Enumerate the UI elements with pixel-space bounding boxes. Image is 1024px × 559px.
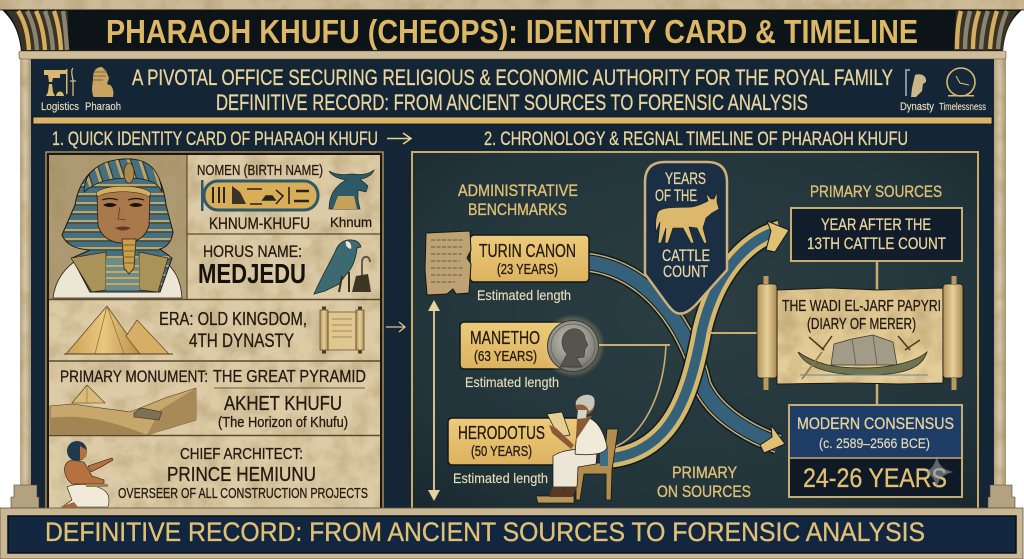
illustration: seated scribe Hemiunu: [60, 441, 113, 507]
scroll: Wadi el-Jarf papyri: (DIARY OF MERER): [807, 316, 916, 333]
title: PHARAOH KHUFU (CHEOPS): IDENTITY CARD & TIMELINE: [106, 13, 918, 50]
chief architect row: CHIEF ARCHITECT:: [180, 446, 303, 463]
icon: silver coin portrait: [541, 314, 605, 378]
panel: chronology and regnal timeline: [412, 152, 978, 510]
cartouche: [201, 180, 318, 211]
icon: dynasty figure: Dynasty: [900, 101, 934, 113]
source: Herodotus: Estimated length: [453, 470, 548, 486]
box: year after the 13th cattle count: 13TH CATTLE COUNT: [807, 234, 946, 253]
panel: years of the cattle count: [645, 162, 727, 314]
chief architect row: [60, 441, 368, 507]
primary monument row: AKHET KHUFU: [224, 393, 342, 415]
source: Turin Canon: TURIN CANON: [479, 241, 576, 261]
box: modern consensus: (c. 2589–2566 BCE): [819, 436, 930, 451]
icon: dynasty figure: [900, 69, 934, 113]
footer banner: DEFINITIVE RECORD: FROM ANCIENT SOURCES TO FORENSIC ANALYSIS: [45, 517, 925, 547]
nomen row: KHNUM-KHUFU: [209, 215, 310, 233]
panel: quick identity card: [46, 152, 383, 510]
source: Manetho: MANETHO: [470, 328, 540, 348]
source: Manetho: [460, 314, 605, 390]
footer banner: [0, 508, 1023, 559]
panel: years of the cattle count: OF THE: [655, 187, 697, 205]
era row: 4TH DYNASTY: [189, 331, 294, 352]
nomen row: Khnum: [330, 214, 372, 230]
label: primary on sources: [657, 463, 751, 501]
connectors: [876, 261, 878, 405]
icon: pharaoh bust: [85, 67, 121, 113]
primary monument row: THE GREAT PYRAMID: [213, 366, 366, 386]
era row: ERA: OLD KINGDOM,: [159, 308, 307, 329]
source: Turin Canon: Estimated length: [477, 287, 571, 303]
subtitle: [132, 65, 893, 115]
horus name row: [198, 240, 371, 294]
heading: primary sources: PRIMARY SOURCES: [810, 182, 942, 201]
section heading 2: 2. CHRONOLOGY & REGNAL TIMELINE OF PHARAOH KHUFU: [484, 129, 908, 150]
panel: years of the cattle count: CATTLE: [662, 247, 710, 265]
primary monument row: [50, 366, 366, 435]
sparkle mark: [925, 455, 954, 489]
source: Herodotus: [448, 395, 618, 503]
primary monument row: PRIMARY MONUMENT:: [60, 368, 208, 386]
chief architect row: PRINCE HEMIUNU: [167, 464, 316, 486]
heading: administrative benchmarks: BENCHMARKS: [468, 200, 567, 219]
box: modern consensus: MODERN CONSENSUS: [797, 415, 954, 433]
horus name row: MEDJEDU: [198, 258, 306, 289]
illustration: seated Herodotus: [536, 395, 618, 503]
era row: [64, 306, 364, 354]
icon: torn papyrus: [425, 231, 471, 295]
arrow head: to modern consensus: [760, 425, 785, 453]
flow streams: [585, 230, 780, 458]
label: primary on sources: PRIMARY: [672, 463, 737, 482]
heading: administrative benchmarks: ADMINISTRATIVE: [458, 181, 578, 200]
icon: pyramids: [64, 306, 173, 354]
source: Herodotus: HERODOTUS: [458, 423, 545, 443]
timeline double arrow: [428, 300, 440, 501]
box: modern consensus: 24-26 YEARS: [803, 463, 947, 493]
arrow head: to year after 13th cattle count: [766, 221, 789, 252]
nomen row: [197, 162, 374, 233]
illustration: boat with stone blocks: [798, 335, 928, 379]
icon: timelessness clock: [939, 68, 986, 113]
section heading 1: 1. QUICK IDENTITY CARD OF PHARAOH KHUFU: [52, 129, 378, 150]
box: modern consensus: [789, 405, 962, 497]
box: year after the 13th cattle count: YEAR AFTER THE: [821, 215, 931, 234]
connector arrow between panels: [386, 322, 405, 332]
source: Turin Canon: [425, 231, 589, 303]
primary monument row: (The Horizon of Khufu): [218, 415, 348, 431]
icon: Khnum ram god: [329, 170, 374, 209]
chief architect row: OVERSEER OF ALL CONSTRUCTION PROJECTS: [118, 486, 368, 502]
subtitle: DEFINITIVE RECORD: FROM ANCIENT SOURCES TO FORENSIC ANALYSIS: [216, 90, 808, 115]
icon: logistics hieroglyphs: Logistics: [41, 101, 79, 113]
source: Herodotus: (50 YEARS): [471, 444, 532, 460]
portrait of Khufu: [53, 159, 182, 298]
nomen row: NOMEN (BIRTH NAME): [197, 162, 323, 179]
scroll: Wadi el-Jarf papyri: THE WADI EL-JARF PAPYRI: [782, 298, 941, 315]
panel: years of the cattle count: COUNT: [663, 263, 708, 281]
horus name row: HORUS NAME:: [203, 242, 302, 261]
source: Manetho: Estimated length: [465, 374, 559, 390]
icon: Horus falcon: [314, 240, 371, 294]
heading: administrative benchmarks: [458, 181, 578, 219]
illustration: giza plateau: [50, 385, 196, 435]
icon: golden bull: [656, 192, 719, 243]
icon: timelessness clock: Timelessness: [939, 101, 986, 113]
icon: logistics hieroglyphs: [41, 68, 79, 113]
panel: years of the cattle count: YEARS: [665, 170, 706, 188]
scroll: Wadi el-Jarf papyri: [757, 276, 963, 390]
source: Turin Canon: (23 YEARS): [497, 262, 558, 278]
box: year after the 13th cattle count: [791, 208, 962, 261]
source: Manetho: (63 YEARS): [474, 349, 537, 365]
label: primary on sources: ON SOURCES: [657, 482, 751, 501]
icon: pharaoh bust: Pharaoh: [85, 101, 121, 113]
icon: scroll: [320, 308, 364, 352]
